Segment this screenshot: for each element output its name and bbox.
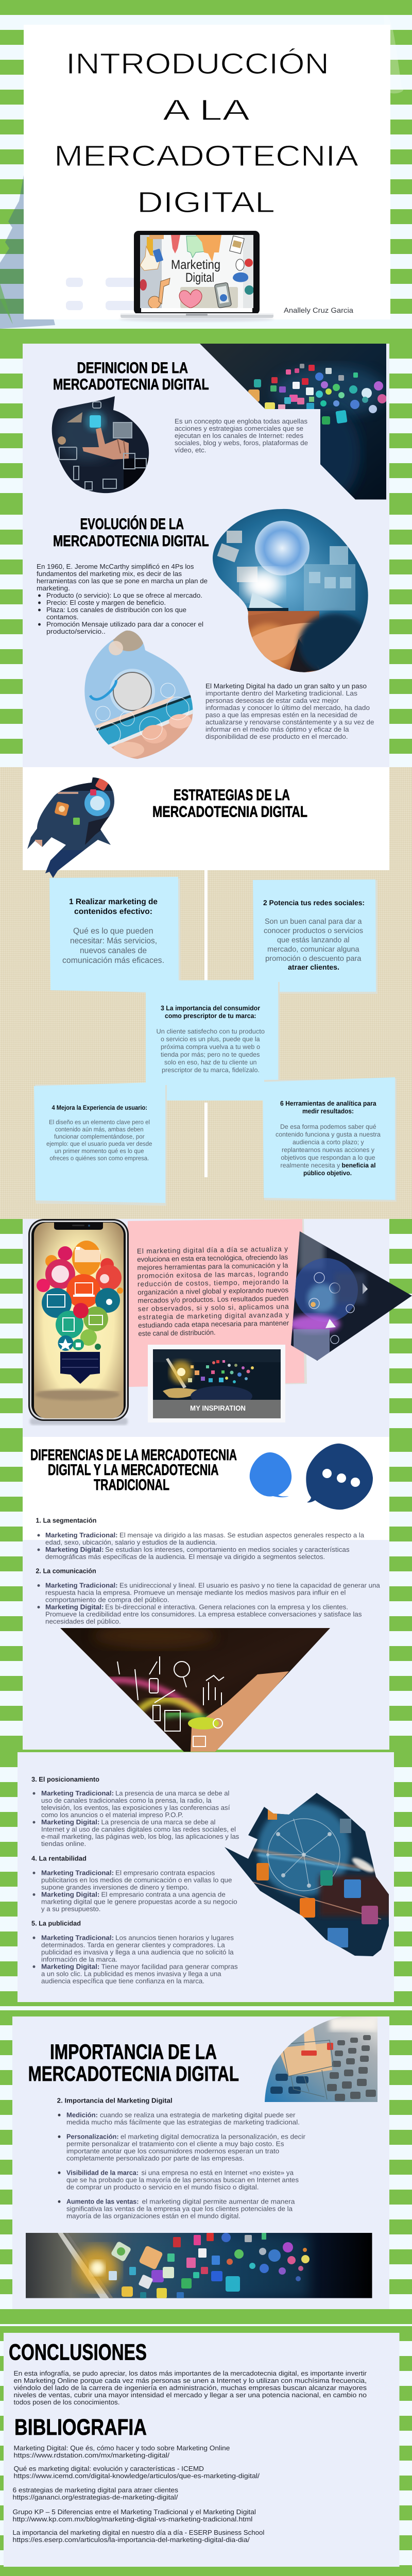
text: importance list: significativa las ventas de la empresa ya que los clientes potenciales de la (66, 2205, 293, 2212)
text: positioning, profitability, advertising: televisión, los eventos, las exposiciones y las conferencias así (41, 1804, 230, 1811)
text: positioning, profitability, advertising (31, 1775, 239, 1985)
text: marketing digital evolution: paso a que las empresas estén en la necesidad de (205, 711, 357, 719)
card: strategy 2: mercado, comunicar alguna (267, 945, 359, 954)
card: pink text block: evoluciona en esta era tecnológica, ofreciendo las (137, 1253, 288, 1263)
text: bibliography list: https://www.rdstation.com/mx/marketing-digital/ (13, 2451, 169, 2459)
card: pink text block: mejores herramientas para la comunicación y la (137, 1261, 288, 1272)
card: pink text block: promoción exitosa de las marcas, logrando (138, 1269, 288, 1280)
text: positioning, profitability, advertising: como los anuncios o el material impreso P.O.P. (41, 1811, 183, 1819)
text: importance list: el marketing digital permite aumentar de manera (142, 2197, 295, 2205)
title: MERCADOTECNIA (54, 140, 358, 173)
text: marketing digital evolution: informadas y conocer lo último del mercado, ha dado (205, 704, 370, 711)
image: globe over tablet and hand (209, 507, 373, 678)
heading: diferencias (30, 1447, 237, 1494)
card: strategy 3: tienda por más; pero no te quedes (161, 1051, 260, 1058)
panel: conclusions and bibliography (4, 2333, 400, 2567)
text: importance list: de comprar un producto o servicio en el mundo físico o digital. (66, 2183, 259, 2191)
card: strategy 1: necesitar: Más servicios, (70, 937, 157, 945)
card: strategy 2: atraer clientes. (288, 963, 339, 971)
text: positioning, profitability, advertising: información de la marca. (41, 1955, 117, 1963)
text: evolution body: marketing. (37, 584, 70, 592)
text: importance list: que se ha probado que la mayoría de las personas buscan en Internet antes (66, 2176, 299, 2183)
text: importance list (57, 2097, 306, 2219)
text: segmentation and communication: Es bi-direccional e interactiva. Genera relaciones con la empresa y los clientes. (105, 1603, 348, 1611)
text: conclusions body: En esta infografía, se pudo apreciar, los datos más importantes de la mercadotecnia digital, es importante invertir (13, 2369, 367, 2377)
text: positioning, profitability, advertising: y a su presupuesto. (41, 1905, 100, 1912)
text: definition body: ejecutan en los canales de Internet: redes (175, 432, 304, 439)
image card: my inspiration: MY INSPIRATION (190, 1404, 246, 1412)
text: evolution body: producto/servicio.. (46, 628, 106, 635)
card: strategy 3: prescriptor de tu marca, fidelízalo. (162, 1066, 260, 1074)
text: positioning, profitability, advertising: Marketing Tradicional: (41, 1789, 114, 1797)
text: importance list: el marketing digital democratiza la personalización, es decir (121, 2132, 306, 2140)
text: definition body: Es un concepto que engloba todas aquellas (175, 417, 308, 425)
text: importance list: cuando se realiza una estrategia de marketing digital puede ser (100, 2111, 296, 2119)
text: positioning, profitability, advertising: marketing digital que le genere propuestas acorde a su negocio (41, 1897, 237, 1905)
text: evolution body: fundamentos del marketing mix, es decir de las (37, 570, 182, 578)
image: head silhouette with digital icons (26, 775, 116, 881)
text: importance list: permite personalizar el tratamiento con el cliente a muy bajo costo. Es (66, 2140, 284, 2147)
text: marketing digital evolution: importante dentro del Marketing tradicional. Las (205, 689, 358, 697)
card: strategy 3 (146, 980, 280, 1100)
text: importance list: completamente personalizado por parte de las empresas. (66, 2154, 244, 2162)
card: strategy 3: 3 La importancia del consumidor (161, 1004, 260, 1012)
heading: importancia: MERCADOTECNIA DIGITAL (28, 2062, 239, 2086)
heading: estrategias: ESTRATEGIAS DE LA (174, 787, 290, 804)
card: pink text block: este canal de distribución. (138, 1329, 216, 1337)
text: segmentation and communication (36, 1517, 381, 1625)
author name: Anallely Cruz Garcia (284, 306, 353, 314)
card: strategy 4 (34, 1082, 167, 1206)
text: importance list: si una empresa no está en Internet «no existe» ya (141, 2168, 294, 2176)
heading: importancia: IMPORTANCIA DE LA (50, 2040, 217, 2064)
text: segmentation and communication: Marketing Tradicional: (45, 1582, 118, 1589)
text: segmentation and communication: necesidades del público. (45, 1618, 121, 1625)
card: strategy 6: De esa forma podemos saber qué (280, 1123, 376, 1130)
card: strategy 4: contenido aún más, ambas deben (55, 1126, 144, 1133)
text: evolution body: Promoción Mensaje utilizado para dar a conocer el (46, 620, 203, 628)
text: positioning, profitability, advertising: 5. La publicidad (31, 1920, 81, 1927)
text: positioning, profitability, advertising: audiencia específica que tiene confianza en la marca. (41, 1977, 204, 1985)
card: strategy 6: contenido funciona y gusta a nuestra (276, 1131, 381, 1138)
text: segmentation and communication: Es unidireccional y lineal. El usuario es pasivo y no tiene la capacidad de generar una (119, 1582, 381, 1589)
card: strategy 1: comunicación más eficaces. (62, 956, 164, 965)
card: pink text block: mercados y/o productos. Los resultados pueden (138, 1294, 289, 1304)
text: positioning, profitability, advertising: El empresario contrata a una agencia de (101, 1890, 226, 1898)
text: importance list: 2. Importancia del Marketing Digital (57, 2097, 173, 2105)
text: segmentation and communication: 2. La comunicación (36, 1567, 96, 1574)
card: strategy 2: promoción o descuento para (265, 955, 362, 963)
icon: laptop with Marketing Digital screen: Marketing (171, 258, 220, 272)
card: strategy 4: un primer momento qué es lo que (55, 1147, 144, 1155)
heading: definicion (53, 360, 209, 393)
text: marketing digital evolution: informar en el medio más óptimo y eficaz de la (205, 725, 349, 733)
text: positioning, profitability, advertising: determinados. Tarda en generar clientes y compradores. La (41, 1941, 225, 1948)
card: strategy 1: nuevos canales de (80, 946, 147, 955)
text: conclusions body (13, 2369, 367, 2406)
heading: definicion: MERCADOTECNIA DIGITAL (53, 376, 209, 393)
heading: evolucion (53, 515, 209, 550)
text: evolution body: herramientas con las que se pone en marcha un plan de (37, 577, 208, 585)
text: bibliography list: https://gananci.org/estrategias-de-marketing-digital/ (12, 2494, 178, 2501)
icon: laptop with Marketing Digital screen (119, 231, 274, 322)
text: importance list: Visibilidad de la marca: (66, 2168, 139, 2176)
text: segmentation and communication: Promueve la credibilidad entre los consumidores. La empresa establece conversaciones y satisface las (45, 1611, 362, 1618)
text: segmentation and communication: Se estudian los intereses, comportamiento en medios sociales y características (105, 1546, 350, 1553)
image: diamond digital globe (288, 1229, 412, 1363)
heading: diferencias: DIGITAL Y LA MERCADOTECNIA (48, 1462, 218, 1479)
card: strategy 2: que estás lanzando al (277, 936, 349, 944)
card: strategy 6: 6 Herramientas de analítica para (280, 1099, 376, 1107)
image: triangle, finger with glowing charts (60, 1623, 330, 1752)
card: strategy 2 (253, 879, 377, 994)
heading: evolucion: EVOLUCIÓN DE LA (80, 515, 184, 533)
text: segmentation and communication: El mensaje va dirigido a las masas. Se estudian aspectos generales respecto a la (119, 1531, 365, 1539)
text: conclusions body: niveles de ventas, cubrir una mayor intensidad el mercado y llegar a ser una potencia nacional, en cambio no (13, 2391, 367, 2399)
text: positioning, profitability, advertising: Marketing Tradicional: (41, 1869, 114, 1876)
text: positioning, profitability, advertising: Marketing Tradicional: (41, 1934, 114, 1941)
card: strategy 1 (49, 877, 181, 994)
text: positioning, profitability, advertising: 4. La rentabilidad (31, 1855, 87, 1862)
text: definition body: vídeo, etc. (175, 446, 206, 454)
image: brush stroke globe network (221, 1790, 391, 1960)
heading: definicion: DEFINICION DE LA (77, 360, 188, 377)
image: hand touching icons (49, 394, 152, 495)
text: positioning, profitability, advertising: 3. El posicionamiento (31, 1775, 99, 1783)
text: importance list: mayoría de las organizaciones están en el mundo digital. (66, 2212, 241, 2219)
text: segmentation and communication: edad, sexo, ubicación, salario y estudios de la audiencia. (45, 1538, 217, 1546)
image: smartphone with lightbulb of icons (28, 1219, 129, 1425)
text: positioning, profitability, advertising: Marketing Digital: (41, 1890, 99, 1898)
text: evolution body: Precio: El coste y margen de beneficio. (46, 599, 166, 606)
icon: speech bubbles (250, 1444, 373, 1510)
text: bibliography list: 6 estrategias de marketing digital para atraer clientes (12, 2486, 179, 2494)
text: positioning, profitability, advertising: Los anuncios tienen horarios y lugares (115, 1934, 234, 1941)
text: segmentation and communication: demográficas más específicas de la audiencia. El mensaje va dirigido a segmentos selectos. (45, 1553, 325, 1561)
text: marketing digital evolution: actualizarse y renovarse constántemente y a su vez de (205, 718, 374, 726)
card: pink text block: estrategia de marketing digital avanzada y (138, 1311, 289, 1321)
text: importance list: importante anotar que los consumidores modernos esperan un trato (66, 2147, 279, 2155)
text: positioning, profitability, advertising: publicitarios en los medios de comunicación o en vallas lo que (41, 1876, 232, 1884)
panel: importance (12, 2016, 389, 2309)
heading: bibliografia: BIBLIOGRAFIA (14, 2415, 147, 2440)
card: strategy 6 (263, 1077, 397, 1201)
text: marketing digital evolution: personas deseosas de estar cada vez mejor (205, 697, 339, 704)
card: strategy 3: próxima compra vuelva a tu web o (161, 1043, 260, 1050)
card: pink text block: El marketing digital día a día se actualiza y (137, 1245, 288, 1255)
card: strategy 4: ejemplo: que el usuario pueda ver desde (46, 1140, 152, 1147)
title (54, 47, 358, 219)
card: strategy 6: público objetivo. (303, 1170, 352, 1177)
card: strategy 3: Un cliente satisfecho con tu producto (157, 1028, 265, 1035)
heading: diferencias: TRADICIONAL (94, 1477, 169, 1494)
text: definition body (175, 417, 308, 454)
text: evolution body: En 1960, E. Jerome McCarthy simplificó en 4Ps los (37, 563, 194, 570)
panel: cover (24, 25, 390, 319)
card: strategy 6: realmente necesita y (280, 1162, 340, 1169)
card: strategy 6: medir resultados: (302, 1107, 354, 1115)
icon: laptop with Marketing Digital screen: Digital (185, 270, 214, 285)
text: definition body: sociales, blog y webs, foros, plataformas de (175, 439, 308, 447)
title: A LA (163, 94, 250, 127)
card: strategy 6: replantearnos nuevas acciones y (282, 1146, 375, 1154)
card: pink text block: organización a nivel global y explorando nuevos (138, 1286, 289, 1296)
text: positioning, profitability, advertising: El empresario contrata espacios (115, 1869, 215, 1876)
image card: my inspiration (148, 1345, 285, 1422)
text: segmentation and communication: respuesta hacia la empresa. Promueve un mensaje mediante los medios masivos para influir en el (45, 1589, 346, 1596)
card: strategy 6: audiencia a corto plazo; y (293, 1139, 364, 1146)
card: pink text block: estudiando cada etapa necesaria para mantener (138, 1319, 289, 1329)
text: evolution body: Plaza: Los canales de distribución con los que (46, 606, 186, 614)
card: strategy 4: 4 Mejora la Experiencia de usuario: (52, 1104, 147, 1111)
image: app icons banner (26, 2233, 372, 2298)
card: strategy 4: ofreces o quiénes son como empresa. (49, 1155, 149, 1162)
card: strategy 4: funcionar complementándose, por (54, 1133, 145, 1140)
card: strategy 2: conocer productos o servicios (264, 927, 363, 935)
text: segmentation and communication: Marketing Digital: (45, 1546, 104, 1553)
text: importance list: Aumento de las ventas: (66, 2197, 139, 2205)
card: strategy 3: solo en eso, haz de tu cliente un (164, 1059, 257, 1066)
card: strategy 3: o servicio es un plus, puede que la (161, 1036, 260, 1043)
card: strategy 1: contenidos efectivo: (74, 907, 152, 916)
text: evolution body (37, 563, 208, 635)
text: positioning, profitability, advertising: La presencia de una marca se debe al (101, 1818, 216, 1826)
heading: conclusiones: CONCLUSIONES (9, 2340, 147, 2365)
card: strategy 1: Qué es lo que pueden (73, 927, 153, 936)
card: pink text block: ser observados, si y solo si, aplicamos una (138, 1302, 289, 1313)
card: strategy 2: Son un buen canal para dar a (265, 918, 362, 926)
text: bibliography list (12, 2444, 264, 2544)
text: evolution body: Producto (o servicio): Lo que se ofrece al mercado. (46, 591, 202, 599)
panel: strategies background (0, 767, 412, 1219)
text: positioning, profitability, advertising: supone grandes inversiones de dinero y tiempo. (41, 1883, 189, 1891)
heading: estrategias: MERCADOTECNIA DIGITAL (152, 804, 307, 820)
text: positioning, profitability, advertising: La presencia de una marca se debe al (115, 1789, 230, 1797)
text: bibliography list: Grupo KP – 5 Diferencias entre el Marketing Tradicional y el Marketing Digital (12, 2508, 256, 2516)
text: importance list: Medición: (66, 2111, 98, 2119)
text: positioning, profitability, advertising: a un solo clic. La publicidad es menos invasiva y llega a una (41, 1970, 221, 1977)
decorative mountain silhouette, cover (0, 15, 403, 329)
panel: differences continued (18, 1752, 394, 2002)
text: bibliography list: Marketing Digital: Que és, cómo hacer y todo sobre Marketing Online (13, 2444, 230, 2452)
text: bibliography list: https://www.icemd.com/digital-knowledge/articulos/que-es-marketing-digital/ (13, 2472, 260, 2480)
text: marketing digital evolution (205, 682, 374, 740)
card: pink text block: reducción de costos, tiempo, mejorando la (138, 1278, 289, 1288)
text: definition body: acciones y estrategias comerciales que se (175, 425, 303, 432)
image: app icons burst (200, 344, 387, 500)
text: positioning, profitability, advertising: Marketing Digital: (41, 1818, 99, 1826)
card: strategy 3: como prescriptor de tu marca: (165, 1012, 256, 1020)
text: conclusions body: en Marketing Online porque cada vez más personas se unen a Internet y lo utilizan con muchísima frecuencia, (13, 2377, 367, 2384)
text: bibliography list: Qué es marketing digital: evolución y características - ICEMD (13, 2465, 204, 2472)
card: strategy 6: objetivos que respondan a lo que (281, 1154, 375, 1161)
text: importance list: medida mucho más fácilmente que las estrategias de marketing tradicional. (66, 2118, 300, 2126)
title: DIGITAL (137, 186, 275, 219)
image: stethoscope on smartphone (82, 626, 196, 762)
card: pink text block (128, 1219, 307, 1387)
text: positioning, profitability, advertising: Internet y al uso de canales digitales como las redes sociales, el (41, 1825, 236, 1833)
text: conclusions body: viéndolo del lado de la carrera de ingeniería en administración, muchas empresas buscan alcanzar mayores (13, 2384, 367, 2392)
text: segmentation and communication: Marketing Tradicional: (45, 1531, 118, 1539)
text: bibliography list: https://es.eserp.com/articulos/la-importancia-del-marketing-digital-dia-dia/ (12, 2536, 250, 2544)
text: positioning, profitability, advertising: Tiene mayor facilidad para generar compras (101, 1962, 238, 1970)
panel: definition and evolution (23, 344, 389, 767)
card: strategy 6: beneficia al (342, 1162, 376, 1169)
text: segmentation and communication: comportamiento de compra del público. (45, 1596, 169, 1603)
heading: importancia (28, 2040, 239, 2086)
heading: evolucion: MERCADOTECNIA DIGITAL (53, 533, 209, 550)
text: bibliography list: http://www.kp.com.mx/blog/marketing-digital-vs-marketing-tradicional.html (12, 2515, 252, 2523)
card: strategy 2: 2 Potencia tus redes sociales: (263, 899, 365, 907)
text: positioning, profitability, advertising: tiendas online. (41, 1840, 86, 1848)
image: shopping cart on keyboard (263, 2014, 379, 2103)
card: strategy 4: El diseño es un elemento clave pero el (49, 1118, 150, 1126)
text: segmentation and communication: Marketing Digital: (45, 1603, 104, 1611)
heading: estrategias (152, 787, 307, 820)
text: marketing digital evolution: disponibilidad de ese producto en el mercado. (205, 733, 348, 740)
text: importance list: Personalización: (66, 2132, 119, 2140)
text: bibliography list: La importancia del marketing digital en nuestro día a día - ESERP Business School (12, 2529, 264, 2536)
title: INTRODUCCIÓN (66, 47, 329, 80)
panel: inspiration background (23, 1219, 389, 1437)
text: positioning, profitability, advertising: e-mail marketing, las páginas web, los blog, las aplicaciones y las (41, 1833, 239, 1840)
heading: diferencias: DIFERENCIAS DE LA MERCADOTECNIA (30, 1447, 237, 1464)
panel: differences (0, 1437, 412, 1752)
text: segmentation and communication: 1. La segmentación (36, 1517, 96, 1524)
text: conclusions body: todos posen de los conocimientos. (13, 2398, 119, 2406)
decorative pills (66, 278, 136, 310)
text: marketing digital evolution: El Marketing Digital ha dado un gran salto y un paso (205, 682, 367, 690)
text: positioning, profitability, advertising: publicidad es invasiva y llega a una audiencia que no solicitó la (41, 1948, 234, 1956)
text: evolution body: contamos. (46, 613, 78, 621)
text: positioning, profitability, advertising: uso de canales tradicionales como la prensa, la radio, la (41, 1797, 212, 1804)
text: positioning, profitability, advertising: Marketing Digital: (41, 1962, 99, 1970)
card: strategy 1: 1 Realizar marketing de (69, 897, 158, 906)
